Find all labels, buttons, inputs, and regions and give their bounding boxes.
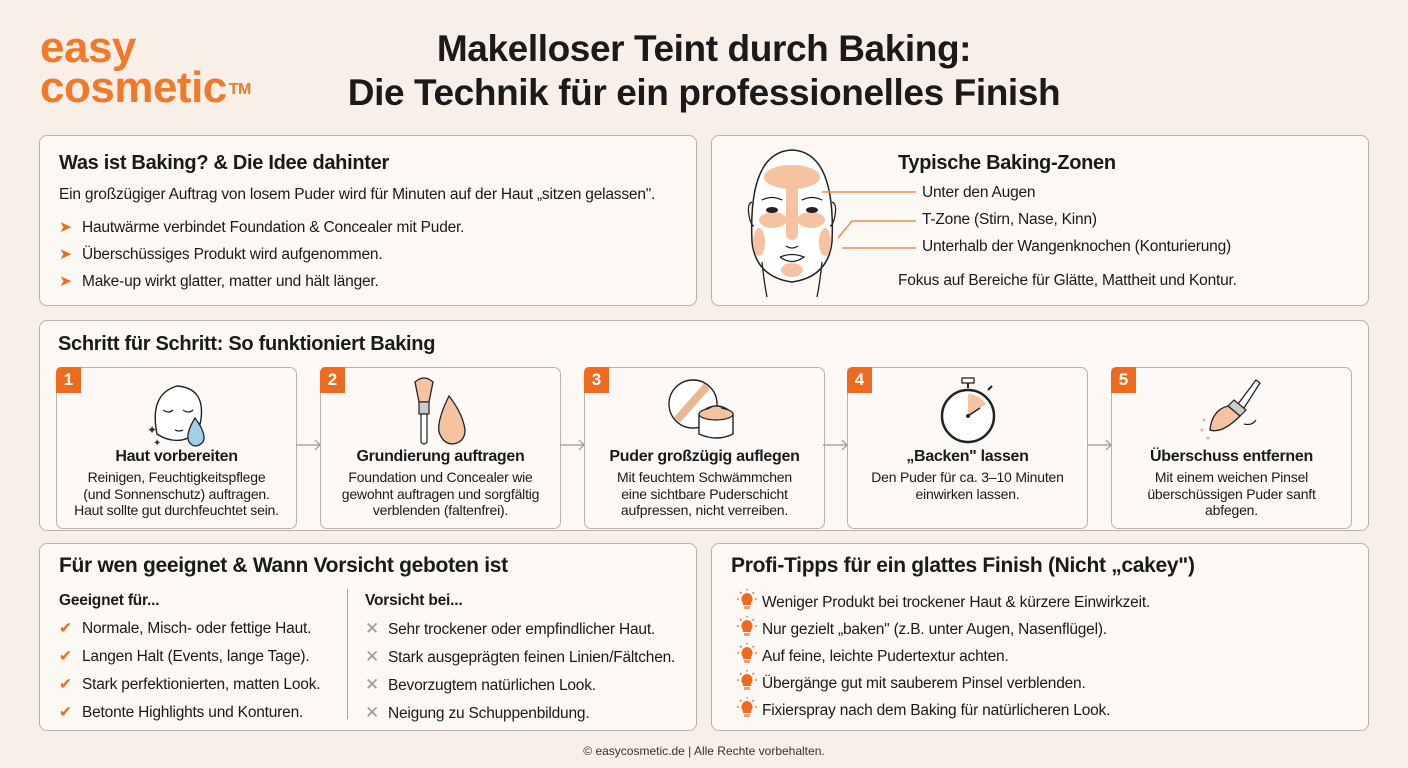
icon: brush — [1200, 379, 1261, 440]
tips list: Fixierspray nach dem Baking für natürlicheren Look. — [762, 702, 1110, 719]
panel: steps — [39, 320, 1369, 531]
step 1: 1 — [64, 370, 73, 389]
panel: profi tipps — [711, 543, 1369, 731]
bullet list: Überschüssiges Produkt wird aufgenommen. — [82, 246, 382, 263]
step 5 — [1111, 367, 1352, 529]
tips list — [737, 589, 1150, 719]
logo: easy — [40, 23, 136, 72]
column: vorsicht: ✕ — [365, 619, 379, 638]
panel: was ist baking: Was ist Baking? & Die Idee dahinter — [59, 152, 389, 174]
bullet list — [59, 219, 464, 290]
step 5: überschüssigen Puder sanft — [1147, 486, 1316, 502]
icon: face water — [147, 385, 205, 449]
step 3: Puder großzügig auflegen — [609, 448, 800, 465]
panel: was ist baking — [39, 135, 697, 306]
step 1: Reinigen, Feuchtigkeitspflege — [88, 469, 265, 485]
column: vorsicht: ✕ — [365, 703, 379, 722]
column: vorsicht: Vorsicht bei... — [365, 592, 462, 609]
column: geeignet: ✔ — [59, 704, 72, 721]
step 1 — [56, 367, 297, 529]
arrow — [296, 440, 320, 450]
column: vorsicht: Stark ausgeprägten feinen Linien/Fältchen. — [388, 649, 675, 666]
step 5: Mit einem weichen Pinsel — [1155, 469, 1308, 485]
panel: profi tipps: Profi-Tipps für ein glattes Finish (Nicht „cakey") — [731, 554, 1195, 577]
panel: baking zones: Unterhalb der Wangenknochen (Konturierung) — [922, 238, 1231, 255]
step 1: Haut vorbereiten — [115, 448, 238, 465]
panel: baking zones: T-Zone (Stirn, Nase, Kinn) — [922, 211, 1097, 228]
title — [348, 28, 1060, 113]
panel: baking zones: Fokus auf Bereiche für Glätte, Mattheit und Kontur. — [898, 272, 1237, 289]
arrow — [560, 440, 584, 450]
bullet list: ➤ — [59, 273, 72, 290]
step 4 — [847, 367, 1088, 529]
step 1: (und Sonnenschutz) auftragen. — [83, 486, 270, 502]
icon: powder jar — [668, 379, 734, 439]
step 3: Mit feuchtem Schwämmchen — [617, 469, 792, 485]
step 3: eine sichtbare Puderschicht — [621, 486, 788, 502]
title: Die Technik für ein professionelles Finish — [348, 72, 1060, 113]
step 2 — [320, 367, 561, 529]
panel: baking zones — [711, 135, 1369, 306]
footer: © easycosmetic.de | Alle Rechte vorbehalten. — [583, 744, 825, 758]
step 5: Überschuss entfernen — [1150, 448, 1313, 465]
icon: face water: ✦ — [153, 438, 161, 449]
column: geeignet: Geeignet für... — [59, 592, 159, 609]
step 2: gewohnt auftragen und sorgfältig — [342, 486, 539, 502]
arrow — [823, 440, 847, 450]
step 5: 5 — [1119, 370, 1128, 389]
panel: suitability: Für wen geeignet & Wann Vorsicht geboten ist — [59, 554, 508, 577]
column: geeignet: Langen Halt (Events, lange Tage). — [82, 648, 310, 665]
tips list: Auf feine, leichte Pudertextur achten. — [762, 648, 1009, 665]
column: vorsicht — [365, 592, 675, 722]
step 4: Den Puder für ca. 3–10 Minuten — [871, 469, 1064, 485]
panel: was ist baking: Ein großzügiger Auftrag von losem Puder wird für Minuten auf der Haut „sitzen gelassen". — [59, 186, 655, 203]
bullet list: ➤ — [59, 246, 72, 263]
step 2: Grundierung auftragen — [357, 448, 524, 465]
panel: suitability — [39, 543, 697, 731]
column: vorsicht: Bevorzugtem natürlichen Look. — [388, 677, 596, 694]
logo — [40, 23, 251, 112]
column: vorsicht: ✕ — [365, 647, 379, 666]
column: geeignet: Betonte Highlights und Konturen. — [82, 704, 303, 721]
step 3: 3 — [592, 370, 601, 389]
tips list: Nur gezielt „baken" (z.B. unter Augen, Nasenflügel). — [762, 621, 1107, 638]
step 1: Haut sollte gut durchfeuchtet sein. — [74, 502, 279, 518]
step 2: verblenden (faltenfrei). — [373, 502, 508, 518]
tips list: Weniger Produkt bei trockener Haut & kürzere Einwirkzeit. — [762, 594, 1150, 611]
column: geeignet — [59, 592, 320, 721]
icon: stopwatch — [940, 377, 996, 444]
column: geeignet: Normale, Misch- oder fettige Haut. — [82, 620, 311, 637]
panel: baking zones: Typische Baking-Zonen — [898, 152, 1116, 174]
icon: brush sponge — [414, 377, 466, 445]
step 4: „Backen" lassen — [906, 448, 1029, 465]
step 4: 4 — [855, 370, 864, 389]
column: geeignet: ✔ — [59, 648, 72, 665]
step 2: Foundation und Concealer wie — [348, 469, 533, 485]
icon: face water: ✦ — [147, 423, 157, 437]
steps heading: Schritt für Schritt: So funktioniert Baking — [58, 333, 435, 355]
column: geeignet: ✔ — [59, 620, 72, 637]
step 2: 2 — [328, 370, 337, 389]
logo: cosmeticTM — [40, 63, 251, 112]
column: vorsicht: Sehr trockener oder empfindlicher Haut. — [388, 621, 655, 638]
bullet list: ➤ — [59, 219, 72, 236]
bullet list: Make-up wirkt glatter, matter und hält länger. — [82, 273, 379, 290]
connector lines — [822, 191, 916, 249]
arrow — [1087, 440, 1111, 450]
title: Makelloser Teint durch Baking: — [437, 28, 971, 69]
column: geeignet: Stark perfektionierten, matten Look. — [82, 676, 320, 693]
column: geeignet: ✔ — [59, 676, 72, 693]
tips list: Übergänge gut mit sauberem Pinsel verblenden. — [762, 675, 1086, 692]
column: vorsicht: Neigung zu Schuppenbildung. — [388, 705, 589, 722]
bullet list: Hautwärme verbindet Foundation & Concealer mit Puder. — [82, 219, 464, 236]
step 3: aufpressen, nicht verreiben. — [621, 502, 788, 518]
column: vorsicht: ✕ — [365, 675, 379, 694]
panel: baking zones: Unter den Augen — [922, 184, 1035, 201]
step 3 — [584, 367, 825, 529]
step 5: abfegen. — [1205, 502, 1258, 518]
icon: face — [748, 149, 836, 298]
step 4: einwirken lassen. — [916, 486, 1020, 502]
